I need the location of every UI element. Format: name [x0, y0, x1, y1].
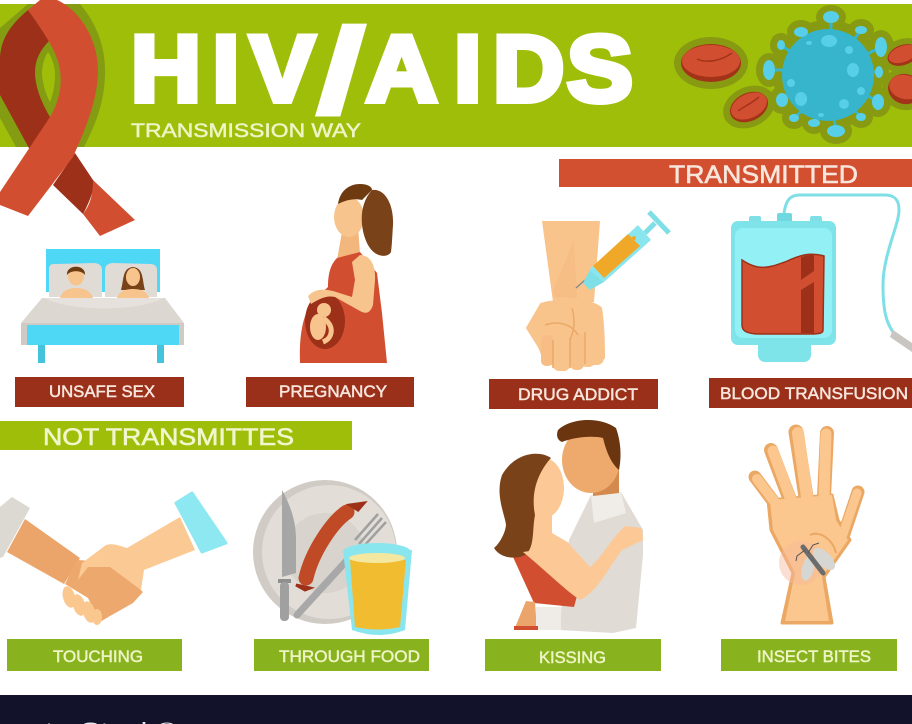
label: pregnancy: PREGNANCY	[279, 382, 387, 401]
label: insect bites: INSECT BITES	[757, 647, 871, 666]
label: through food	[254, 639, 429, 671]
label: kissing: KISSING	[539, 648, 606, 667]
label: drug addict: DRUG ADDICT	[518, 385, 638, 404]
title: /	[315, 3, 367, 139]
label: touching	[7, 639, 182, 671]
title: AIDS	[366, 17, 633, 121]
label: pregnancy	[246, 377, 414, 407]
icon: hand with insect	[755, 432, 858, 623]
title	[131, 3, 633, 139]
icon: plate with sausage, cutlery and glass	[253, 480, 412, 635]
icon: handshake	[0, 493, 226, 625]
label: blood transfusion: BLOOD TRANSFUSION	[720, 384, 908, 403]
label: blood transfusion	[709, 378, 912, 408]
icon: bed with couple	[21, 249, 184, 363]
icon: red ribbon	[0, 0, 135, 236]
icon: embracing couple	[494, 420, 643, 633]
title: HIV	[131, 17, 315, 122]
heading: not transmittes	[0, 421, 352, 451]
label: unsafe sex: UNSAFE SEX	[49, 382, 155, 401]
label: touching: TOUCHING	[53, 647, 143, 666]
heading: transmitted: TRANSMITTED	[669, 161, 858, 189]
icon: fist with syringe	[527, 212, 669, 371]
label: drug addict	[489, 379, 658, 409]
footer bar	[0, 695, 912, 724]
header banner	[0, 4, 912, 147]
label: unsafe sex	[15, 377, 184, 407]
subtitle: TRANSMISSION WAY	[131, 120, 361, 142]
label: kissing	[485, 639, 661, 671]
icon: blood bag with tube	[731, 195, 912, 362]
icon: virus and blood cells	[674, 5, 912, 144]
icon: pregnant woman	[300, 184, 393, 363]
heading: not transmittes: NOT TRANSMITTES	[43, 424, 294, 451]
heading: transmitted	[559, 159, 912, 189]
label: insect bites	[721, 639, 897, 671]
label: through food: THROUGH FOOD	[279, 647, 420, 666]
